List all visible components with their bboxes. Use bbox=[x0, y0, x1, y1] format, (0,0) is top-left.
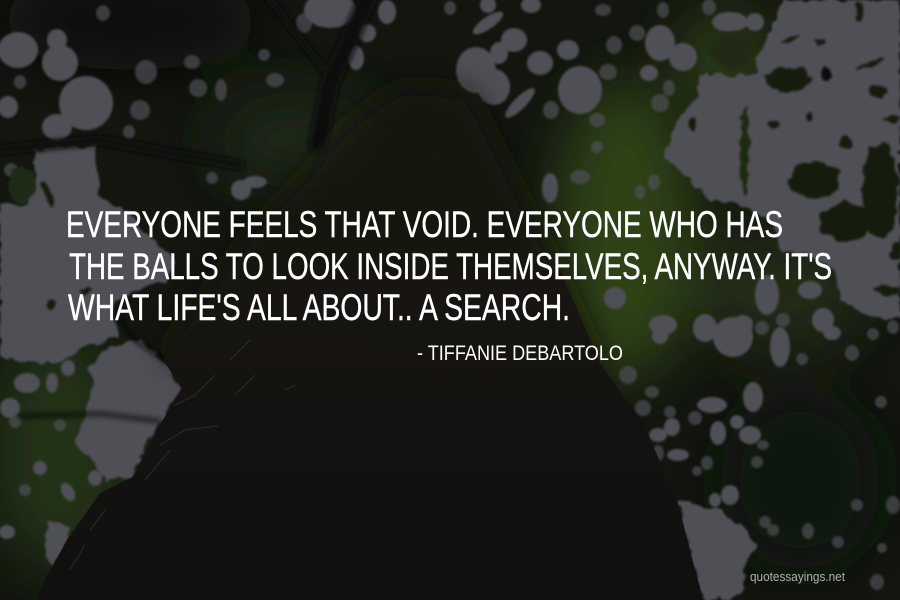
tree branches bbox=[0, 0, 367, 421]
attribution: - TIFFANIE DEBARTOLO bbox=[417, 342, 623, 365]
quote text bbox=[66, 204, 832, 328]
tree trunk bbox=[37, 270, 703, 600]
upper tree trunk bbox=[160, 85, 600, 500]
bark highlights bbox=[70, 340, 295, 570]
quote line 3: WHAT LIFE'S ALL ABOUT.. A SEARCH. bbox=[68, 287, 570, 328]
dark gaps in bright canopy bbox=[8, 2, 900, 310]
watermark: quotessayings.net bbox=[750, 569, 845, 584]
